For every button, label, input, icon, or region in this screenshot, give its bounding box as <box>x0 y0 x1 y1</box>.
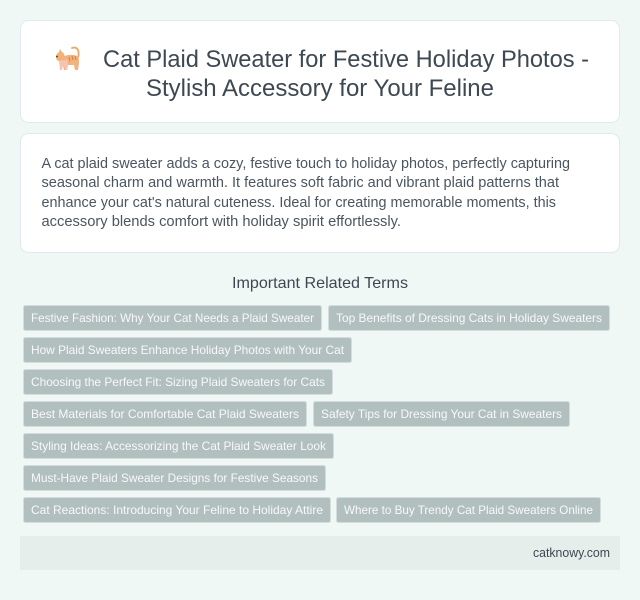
tag: must-have designs: Must-Have Plaid Sweater Designs for Festive Seasons <box>31 471 318 485</box>
description text: enhance your cat's natural cuteness. Ideal for creating memorable moments, this <box>42 194 556 211</box>
tag: safety tips <box>314 402 570 426</box>
tag: cat reactions: Cat Reactions: Introducing Your Feline to Holiday Attire <box>31 503 323 517</box>
footer source text: catknowy.com <box>533 545 610 560</box>
tag: perfect fit: Choosing the Perfect Fit: Sizing Plaid Sweaters for Cats <box>31 375 325 389</box>
title text <box>103 46 589 102</box>
tag list <box>24 306 610 522</box>
tag: where to buy <box>336 498 600 522</box>
tag: styling ideas: Styling Ideas: Accessorizing the Cat Plaid Sweater Look <box>31 439 327 453</box>
description text <box>42 155 570 230</box>
tag: safety tips: Safety Tips for Dressing Your Cat in Sweaters <box>321 407 562 421</box>
footer <box>20 536 620 570</box>
tag: cat reactions <box>24 498 330 522</box>
tag: festive fashion: Festive Fashion: Why Your Cat Needs a Plaid Sweater <box>31 311 314 325</box>
tag: best materials: Best Materials for Comfortable Cat Plaid Sweaters <box>31 407 299 421</box>
tag: enhance photos: How Plaid Sweaters Enhance Holiday Photos with Your Cat <box>31 343 345 357</box>
tag: perfect fit <box>24 370 332 394</box>
panel: description card <box>20 134 620 252</box>
description text: accessory blends comfort with holiday spirit effortlessly. <box>42 213 401 230</box>
tag: best materials <box>24 402 306 426</box>
title text: Stylish Accessory for Your Feline <box>146 75 494 102</box>
tag: enhance photos <box>24 338 352 362</box>
tag: where to buy: Where to Buy Trendy Cat Plaid Sweaters Online <box>344 503 593 517</box>
description text: seasonal charm and warmth. It features soft fabric and vibrant plaid patterns that <box>42 174 560 191</box>
panel: title card <box>20 20 620 122</box>
icon: cat <box>56 48 79 70</box>
tag: top benefits: Top Benefits of Dressing Cats in Holiday Sweaters <box>336 311 602 325</box>
tag: festive fashion <box>24 306 322 330</box>
tag: top benefits <box>328 306 610 330</box>
tag: must-have designs <box>24 466 326 490</box>
title text: Cat Plaid Sweater for Festive Holiday Photos - <box>103 46 589 73</box>
tag: styling ideas <box>24 434 334 458</box>
description text: A cat plaid sweater adds a cozy, festive touch to holiday photos, perfectly capturing <box>42 155 570 172</box>
heading: important related terms: Important Related Terms <box>232 275 408 292</box>
